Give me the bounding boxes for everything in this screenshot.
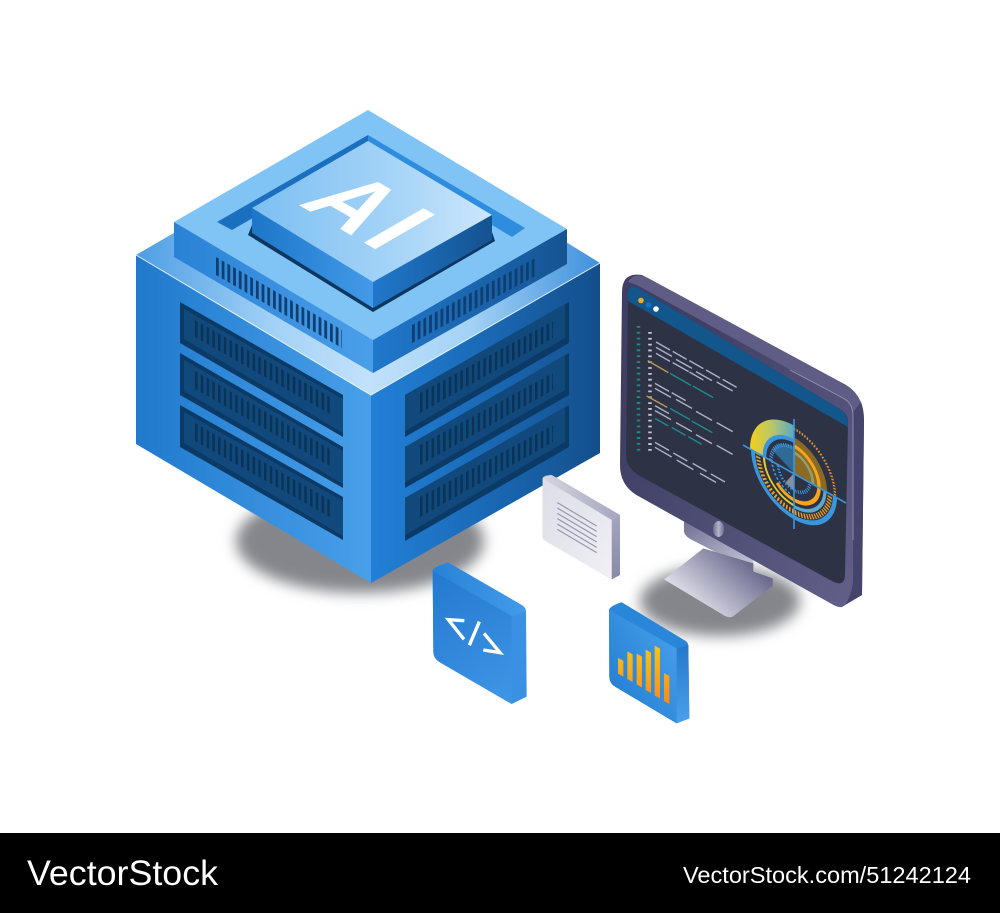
bezel right side — [846, 402, 864, 604]
window dots — [638, 298, 659, 312]
monitor bezel — [620, 275, 864, 607]
screen header bar — [628, 286, 848, 427]
monitor stand — [664, 517, 773, 617]
AI server — [136, 110, 600, 583]
bezel top edge — [628, 275, 861, 412]
footer image id: VectorStock.com/51242124 — [683, 862, 971, 888]
AI label: AI — [278, 159, 463, 266]
server body — [136, 120, 600, 583]
upper tier — [174, 110, 567, 373]
chart card — [609, 602, 689, 723]
document card — [543, 475, 620, 579]
AI chip — [248, 141, 495, 312]
bezel highlight line — [790, 370, 853, 540]
monitor — [620, 275, 864, 607]
footer brand: VectorStock — [27, 854, 219, 893]
left rack panels — [180, 302, 343, 540]
monitor logo button — [713, 521, 724, 537]
code card — [433, 563, 527, 704]
code lines — [638, 326, 737, 482]
footer bar — [0, 833, 1000, 913]
screen — [626, 286, 848, 583]
right rack panels — [405, 302, 569, 541]
document text lines — [557, 503, 597, 553]
icon: code brackets — [448, 620, 500, 653]
bar chart — [618, 646, 669, 704]
shadow under monitor — [640, 566, 800, 636]
radial gauge chart — [743, 406, 846, 540]
shadow under server — [236, 489, 484, 593]
